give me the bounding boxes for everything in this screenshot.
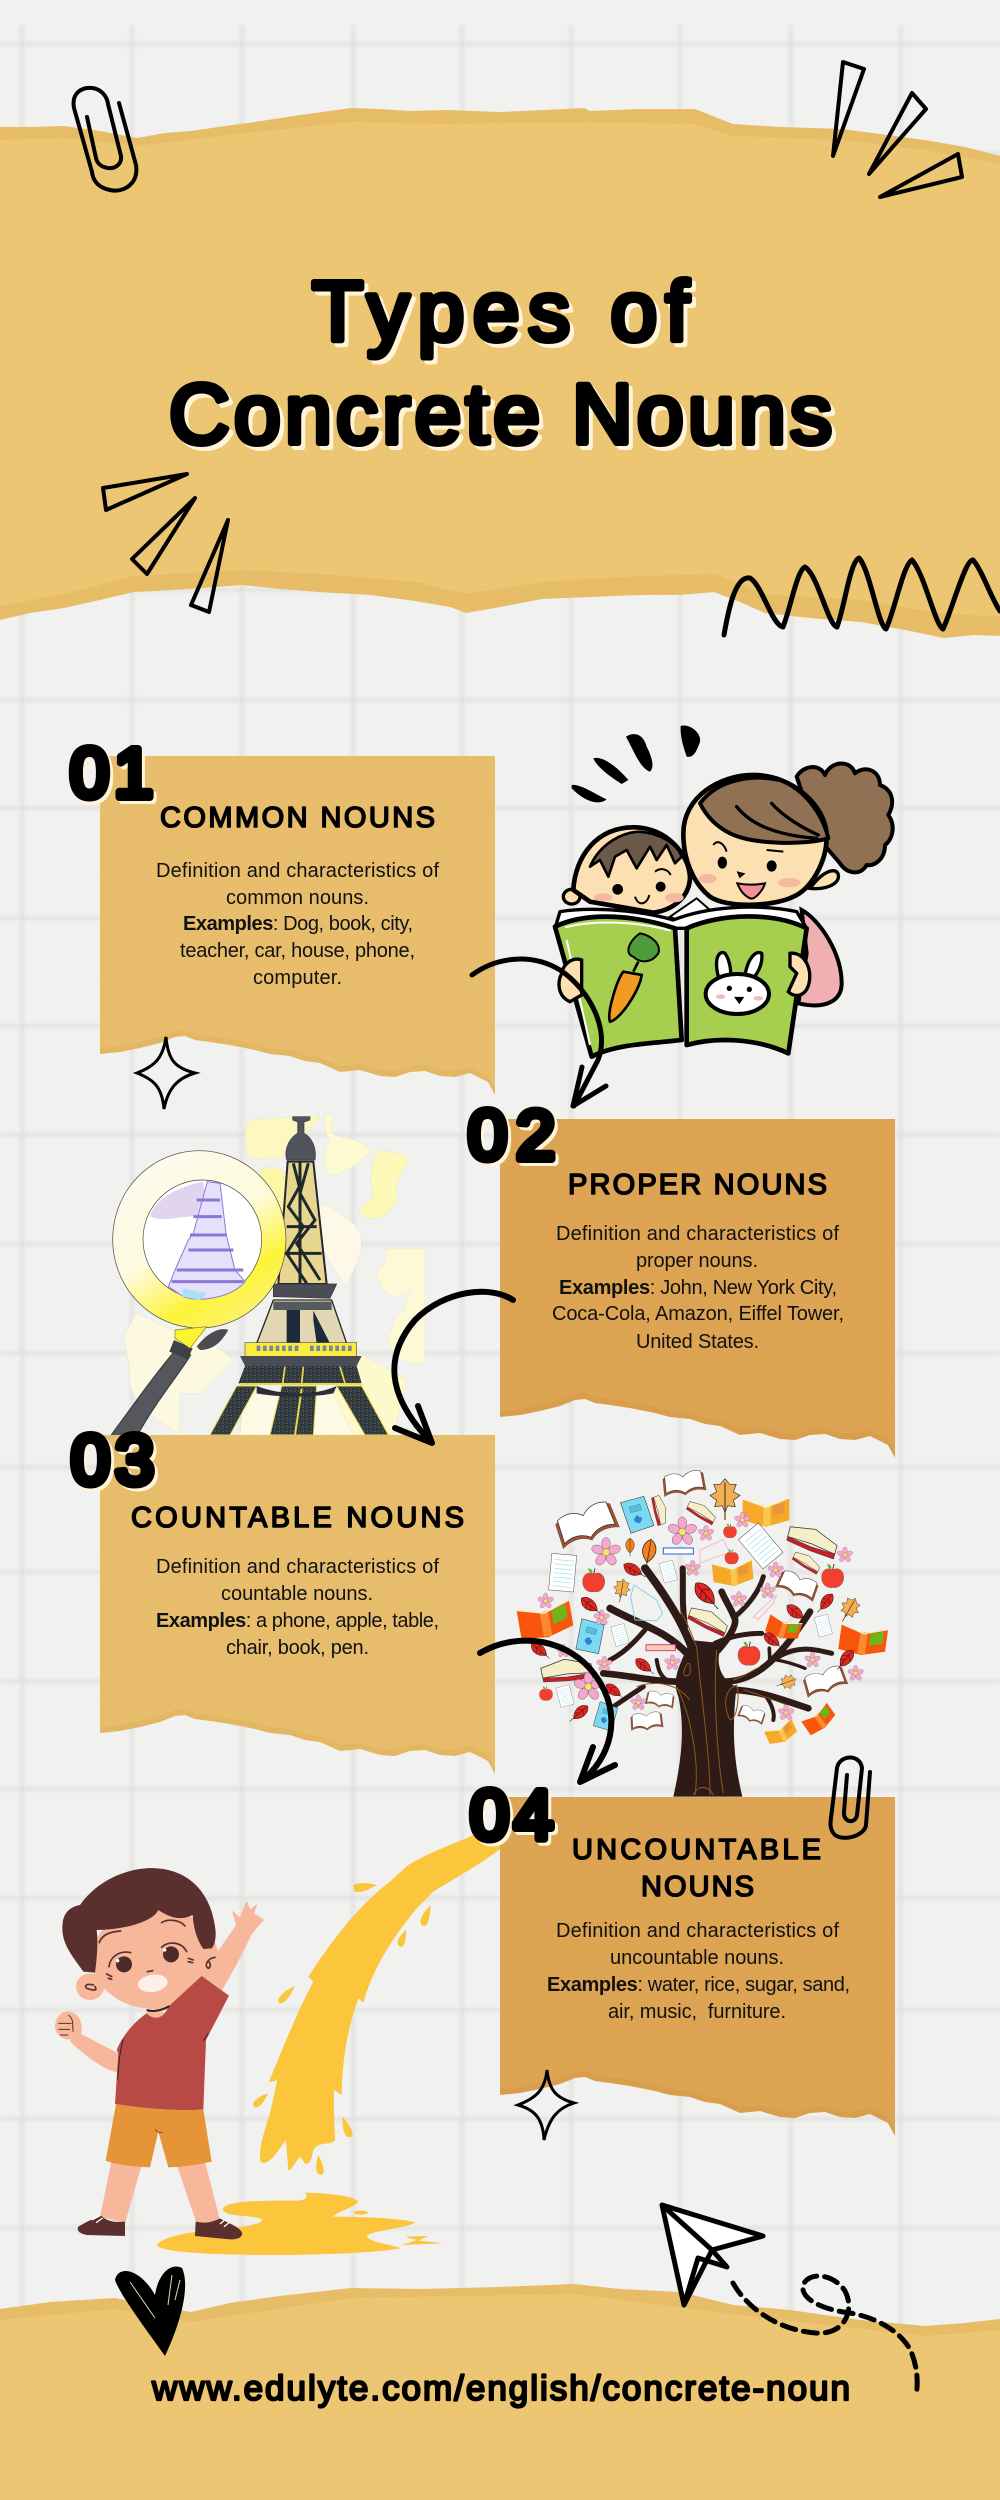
heading: proper nouns: PROPER NOUNS (568, 1169, 827, 1201)
number 02: 02 (468, 1096, 555, 1174)
title (169, 264, 836, 465)
number 04: 04 (470, 1776, 553, 1854)
text: uncountable nouns definition: Definition and characteristics of (556, 1920, 839, 1942)
text: common nouns definition: teacher, car, house, phone, (180, 940, 415, 962)
icon: paperclip top left (74, 88, 136, 191)
title: Types of (316, 268, 694, 362)
heading: common nouns: COMMON NOUNS (160, 802, 435, 834)
icon: zigzag scribble (724, 558, 1000, 635)
text: proper nouns definition (552, 1223, 844, 1353)
arrow: card 3 to card 4 (480, 1641, 615, 1782)
title: Concrete Nouns (173, 371, 836, 465)
text: countable nouns definition: Definition and characteristics of (156, 1556, 439, 1578)
text: proper nouns definition: Coca-Cola, Amazon, Eiffel Tower, (552, 1303, 844, 1325)
heading: uncountable nouns: NOUNS (641, 1871, 754, 1903)
text: common nouns definition: Examples: Dog, book, city, (183, 913, 413, 935)
text: common nouns definition: computer. (253, 967, 342, 989)
number 01: 01 (73, 737, 156, 815)
illustration: splash of yellow liquid and puddle (157, 1832, 517, 2255)
text: proper nouns definition: Examples: John, New York City, (559, 1277, 837, 1299)
heading: countable nouns: COUNTABLE NOUNS (131, 1502, 464, 1534)
panel: countable nouns card (100, 1435, 495, 1774)
text: common nouns definition: common nouns. (226, 887, 369, 909)
panel: proper nouns card (500, 1119, 895, 1458)
heading: uncountable nouns: UNCOUNTABLE (572, 1834, 821, 1866)
panel: common nouns card (100, 756, 495, 1095)
number 04: 04 (473, 1779, 556, 1857)
icon: sparkle star under card 4 (518, 2070, 574, 2140)
text: countable nouns definition: countable nouns. (221, 1583, 373, 1605)
text: uncountable nouns definition: Examples: water, rice, sugar, sand, (547, 1974, 850, 1996)
icon: dashed flight path (733, 2276, 917, 2396)
text: uncountable nouns definition (547, 1920, 850, 2023)
panel: uncountable nouns card (500, 1797, 895, 2136)
icon: paperclip on card 4 (830, 1757, 870, 1838)
number 02: 02 (471, 1099, 558, 1177)
text: countable nouns definition: Examples: a phone, apple, table, (156, 1610, 439, 1632)
illustration: tree of books (516, 1469, 888, 1797)
heading: uncountable nouns (572, 1834, 821, 1903)
text: common nouns definition (156, 860, 439, 989)
number 03: 03 (71, 1421, 154, 1499)
text: proper nouns definition: Definition and characteristics of (556, 1223, 839, 1245)
text: common nouns definition: Definition and characteristics of (156, 860, 439, 882)
title: Concrete Nouns (169, 367, 832, 461)
icon: scribbled heart (115, 2267, 185, 2356)
icon: paper plane (662, 2205, 763, 2305)
text: proper nouns definition: proper nouns. (636, 1250, 758, 1272)
arrow: card 2 to card 3 (394, 1292, 513, 1443)
illustration: Eiffel Tower with magnifying glass (110, 1115, 425, 1437)
top torn paper banner (0, 108, 1000, 638)
text: countable nouns definition: chair, book, pen. (226, 1637, 369, 1659)
illustration: mother and child reading (555, 726, 893, 1057)
text: countable nouns definition (156, 1556, 439, 1659)
icon: burst triangles left (103, 474, 228, 612)
text: uncountable nouns definition: air, music, furniture. (608, 2001, 786, 2023)
number 03: 03 (74, 1424, 157, 1502)
bottom torn paper banner (0, 2284, 1000, 2500)
icon: sparkle star under card 1 (137, 1037, 195, 1109)
footer url: www.edulyte.com/english/concrete-noun (151, 2369, 850, 2408)
text: proper nouns definition: United States. (636, 1331, 759, 1353)
icon: burst triangles top right (833, 62, 962, 197)
number 01: 01 (70, 734, 153, 812)
title: Types of (312, 264, 690, 358)
text: uncountable nouns definition: uncountable nouns. (610, 1947, 784, 1969)
illustration: boy waving (55, 1868, 263, 2239)
arrow: card 1 to card 2 (472, 959, 606, 1106)
